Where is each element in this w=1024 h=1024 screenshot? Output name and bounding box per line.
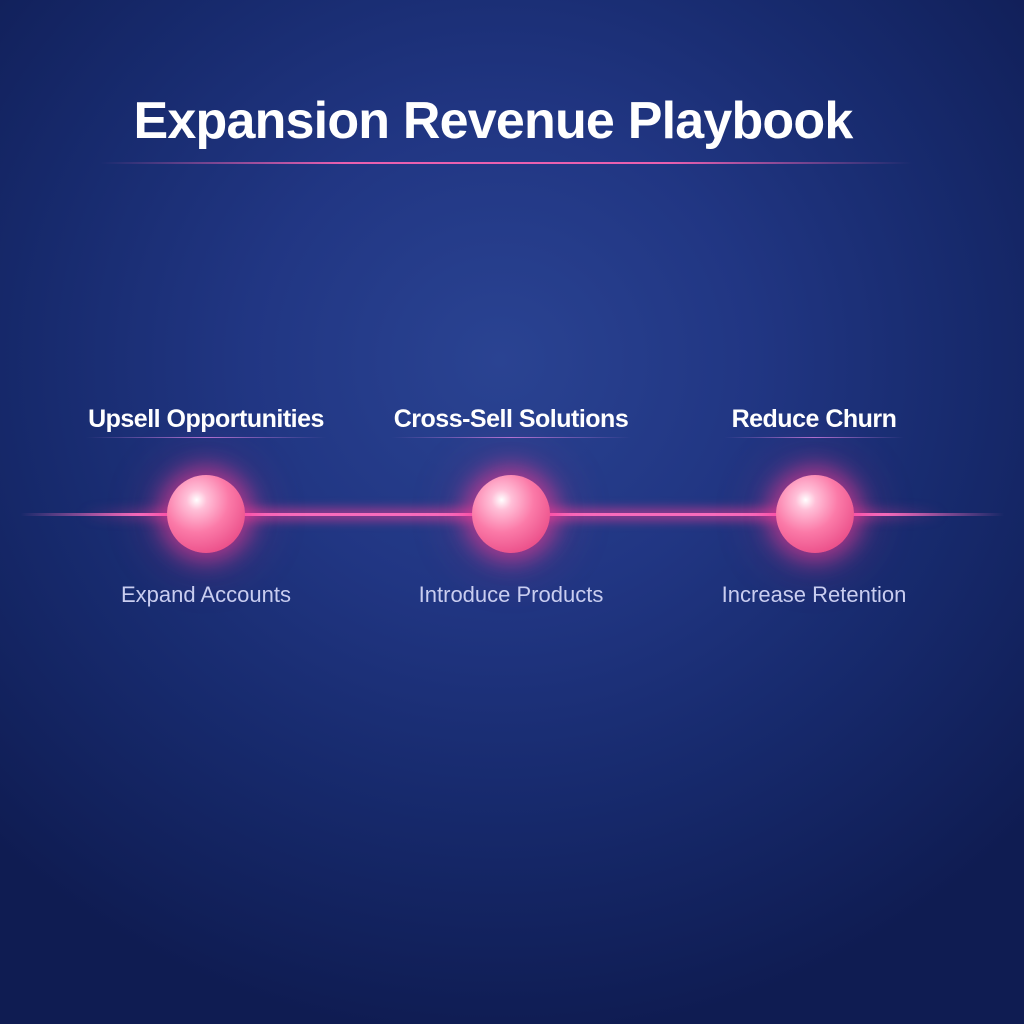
- node 1: [167, 475, 245, 553]
- node 3: [776, 475, 854, 553]
- subtitle 3: Increase Retention: [722, 582, 906, 607]
- title underline: [100, 162, 912, 164]
- heading: upsell: Upsell Opportunities: [88, 405, 324, 433]
- heading: churn: Reduce Churn: [732, 405, 896, 433]
- title: Expansion Revenue Playbook: [134, 92, 852, 150]
- step 2: cross-sell: [394, 405, 628, 607]
- heading underline: [391, 437, 631, 438]
- connector line: [20, 513, 1004, 516]
- step 1: upsell: [88, 405, 324, 607]
- connector glow: [80, 508, 944, 521]
- subtitle 2: Introduce Products: [419, 582, 603, 607]
- node 2: [472, 475, 550, 553]
- subtitle 1: Expand Accounts: [121, 582, 291, 607]
- step 3: churn: [722, 405, 906, 607]
- heading underline: [724, 437, 904, 438]
- heading: cross-sell: Cross-Sell Solutions: [394, 405, 628, 433]
- heading underline: [86, 437, 326, 438]
